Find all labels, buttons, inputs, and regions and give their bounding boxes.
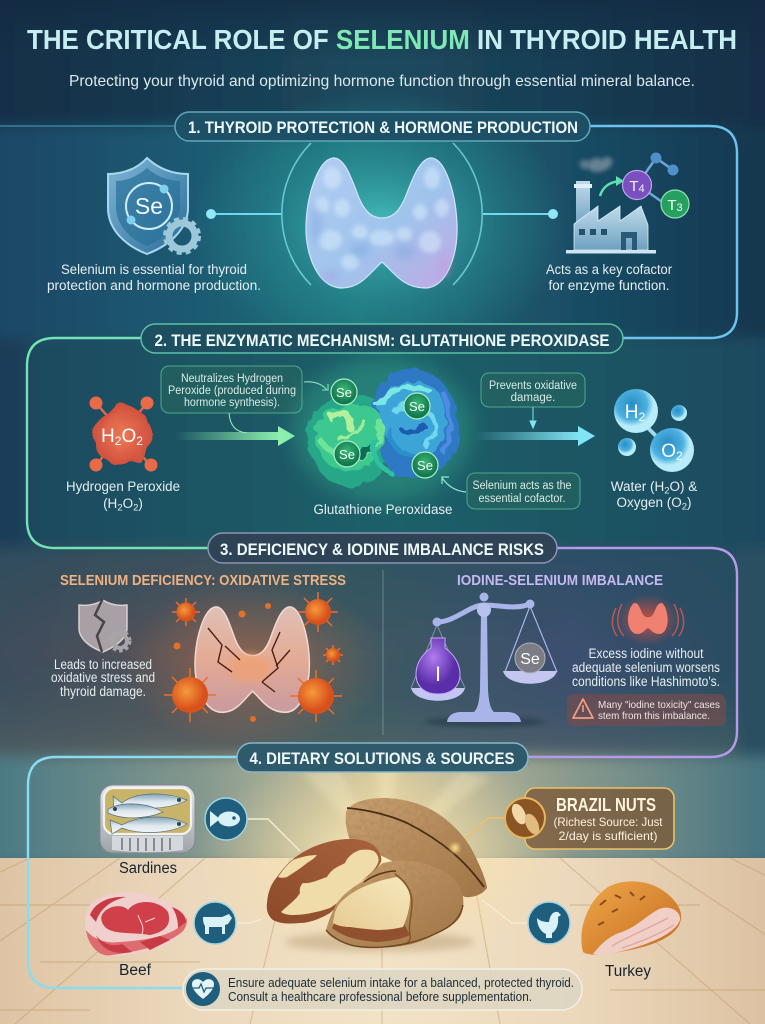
callout: brazil nuts: 2/day is sufficient)	[558, 829, 658, 843]
text: excess iodine: adequate selenium worsens	[572, 660, 720, 675]
callout: neutralizes peroxide	[161, 366, 302, 413]
label: beef: Beef	[119, 962, 152, 979]
callout: iodine toxicity warning: Many "iodine toxicity" cases	[598, 699, 720, 711]
text: excess iodine: conditions like Hashimoto's.	[572, 674, 720, 689]
label: water and oxygen: Oxygen (O	[616, 495, 682, 510]
label: water and oxygen: 2	[682, 502, 687, 512]
illustration: balance scale: Se	[520, 651, 540, 668]
icon: hydrogen peroxide molecule: O	[121, 426, 136, 447]
illustration: healthy thyroid	[306, 158, 457, 288]
callout: selenium cofactor	[442, 473, 580, 509]
section 1 heading pill: 1. THYROID PROTECTION & HORMONE PRODUCTION	[188, 118, 578, 137]
arrow: enzyme to water	[475, 407, 595, 446]
illustration: sardine can	[100, 785, 195, 853]
icon: selenium shield	[108, 158, 199, 254]
text: excess iodine	[572, 646, 720, 689]
text: excess iodine: Excess iodine without	[588, 646, 704, 661]
callout: neutralizes peroxide: Peroxide (produced during	[168, 385, 296, 397]
text: key cofactor: Acts as a key cofactor	[546, 262, 672, 277]
text: oxidative stress	[51, 657, 155, 699]
callout: neutralizes peroxide: hormone synthesis).	[184, 397, 280, 409]
illustration: glutathione peroxidase enzyme: Se	[409, 399, 425, 414]
heading: iodine selenium imbalance: IODINE-SELENIUM IMBALANCE	[457, 572, 663, 589]
icon: hormone factory: T	[629, 178, 639, 195]
text: selenium protection	[47, 262, 261, 293]
label: water and oxygen	[611, 479, 697, 512]
big closed shell	[346, 798, 487, 897]
label: water and oxygen: 2	[664, 486, 670, 496]
icon: hormone factory: 4	[639, 183, 645, 195]
icon: hydrogen peroxide molecule: H	[101, 426, 115, 447]
illustration: glutathione peroxidase enzyme: Se	[336, 385, 352, 400]
icon: broken shield	[79, 598, 130, 652]
label: glutathione peroxidase: Glutathione Peroxidase	[314, 502, 452, 517]
label: sardines: Sardines	[119, 860, 177, 877]
illustration: roast turkey	[581, 881, 681, 955]
footer note	[183, 969, 582, 1010]
section 2 heading pill: 2. THE ENZYMATIC MECHANISM: GLUTATHIONE PEROXIDASE	[154, 331, 610, 350]
viruses	[164, 592, 343, 722]
badge: fish	[205, 798, 300, 851]
icon: hydrogen peroxide molecule	[90, 396, 158, 472]
text: oxidative stress: Leads to increased	[54, 657, 152, 672]
illustration: glutathione peroxidase enzyme	[292, 358, 472, 502]
label: water and oxygen: )	[687, 495, 692, 510]
icon: water and oxygen bubbles: O	[661, 441, 676, 462]
callout: brazil nuts: BRAZIL NUTS	[556, 795, 656, 815]
icon: water and oxygen bubbles	[614, 389, 694, 472]
section 4 heading pill: 4. DIETARY SOLUTIONS & SOURCES	[250, 749, 514, 768]
label: water and oxygen: O) &	[670, 479, 697, 494]
connector: shield to thyroid	[206, 209, 281, 219]
section 1 heading pill	[175, 112, 590, 141]
callout: iodine toxicity warning: stem from this imbalance.	[598, 710, 710, 722]
arrow: peroxide to enzyme	[175, 382, 328, 446]
icon: water and oxygen bubbles: 2	[639, 410, 646, 424]
text: key cofactor: for enzyme function.	[548, 278, 670, 293]
text: selenium protection: Selenium is essential for thyroid	[61, 262, 247, 277]
heading: selenium deficiency: SELENIUM DEFICIENCY: OXIDATIVE STRESS	[60, 572, 346, 589]
label: hydrogen peroxide: )	[138, 496, 143, 511]
icon: inflamed thyroid	[612, 594, 684, 646]
callout: iodine toxicity warning	[567, 694, 726, 726]
illustration: damaged thyroid	[195, 607, 309, 712]
illustration: balance scale: I	[435, 663, 441, 686]
callout: brazil nuts: (Richest Source: Just	[554, 815, 663, 829]
callout: selenium cofactor: essential cofactor.	[478, 493, 566, 505]
icon: hormone factory: 3	[677, 202, 683, 214]
wood table planks	[0, 858, 765, 1024]
section 3 heading pill	[208, 533, 557, 563]
connector: thyroid to factory	[483, 209, 558, 219]
label: turkey: Turkey	[605, 963, 651, 980]
icon: hydrogen peroxide molecule: 2	[115, 434, 122, 448]
callout: prevents oxidative damage	[481, 373, 585, 407]
text: key cofactor	[546, 262, 672, 293]
illustration: glutathione peroxidase enzyme: Se	[339, 447, 355, 462]
label: hydrogen peroxide: Hydrogen Peroxide	[66, 479, 180, 494]
icon: hormone factory	[566, 152, 689, 254]
section 2 heading pill	[141, 324, 623, 353]
label: hydrogen peroxide: O	[123, 496, 133, 511]
illustration: balance scale	[411, 592, 557, 727]
thyroid ring	[282, 143, 482, 285]
icon: water and oxygen bubbles: 2	[676, 449, 683, 463]
label: hydrogen peroxide	[66, 479, 180, 514]
illustration: beef steak	[85, 892, 187, 956]
badge: cow	[194, 902, 262, 944]
text: oxidative stress: thyroid damage.	[60, 684, 146, 699]
icon: selenium shield: Se	[135, 193, 163, 219]
connector: nuts to callout	[456, 818, 504, 848]
label: water and oxygen: Water (H	[611, 479, 664, 494]
footer note: Ensure adequate selenium intake for a balanced, protected thyroid.	[228, 975, 574, 990]
label: hydrogen peroxide: 2	[117, 502, 123, 514]
callout: brazil nuts	[505, 788, 674, 849]
label: hydrogen peroxide: (H	[103, 496, 117, 511]
divider	[382, 570, 384, 735]
callout: selenium cofactor: Selenium acts as the	[472, 480, 572, 492]
section 3 heading pill: 3. DEFICIENCY & IODINE IMBALANCE RISKS	[220, 540, 544, 559]
open shell	[326, 861, 463, 948]
callout: neutralizes peroxide: Neutralizes Hydrogen	[181, 373, 283, 385]
brown nut	[267, 839, 381, 924]
badge: turkey	[482, 900, 570, 944]
section 4 heading pill	[237, 743, 528, 772]
icon: hormone factory: T	[667, 197, 677, 214]
text: oxidative stress: oxidative stress and	[51, 670, 155, 685]
label: hydrogen peroxide: 2	[133, 502, 138, 514]
title: THE CRITICAL ROLE OF SELENIUM IN THYROID HEALTH	[27, 24, 737, 55]
subtitle: Protecting your thyroid and optimizing hormone function through essential mineral balance.	[69, 73, 695, 90]
text: selenium protection: protection and hormone production.	[47, 278, 261, 293]
warm glow behind nuts	[195, 750, 575, 960]
footer note: Consult a healthcare professional before supplementation.	[228, 989, 532, 1004]
callout: prevents oxidative damage: damage.	[511, 392, 555, 404]
icon: water and oxygen bubbles: H	[625, 402, 639, 423]
callout: prevents oxidative damage: Prevents oxidative	[489, 380, 577, 392]
illustration: brazil nuts	[267, 798, 487, 952]
illustration: glutathione peroxidase enzyme: Se	[417, 458, 433, 473]
icon: hydrogen peroxide molecule: 2	[136, 434, 143, 448]
